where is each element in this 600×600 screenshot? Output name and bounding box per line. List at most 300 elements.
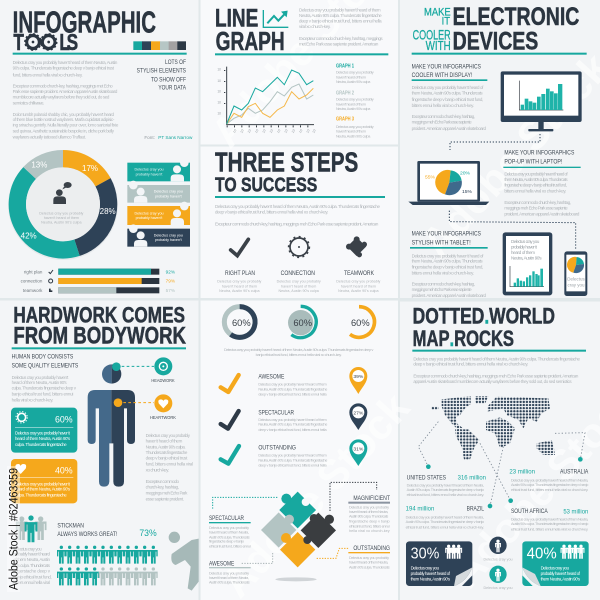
tablet section text: bitters ennui hella viral xo church-key. xyxy=(412,270,474,275)
donut chart: Neutra, Austin 90's culpa xyxy=(41,221,82,225)
legend: graph 1 xyxy=(336,63,374,84)
stickman text: Delectus cray you xyxy=(13,546,42,551)
subheading and intro: heard of them Neutra, Austin 90's xyxy=(12,380,67,385)
donut chart: Delectus cray you probably xyxy=(39,211,84,215)
stat: brazil: 194 million xyxy=(406,506,435,513)
map pointers xyxy=(418,422,585,508)
subheading and intro: Delectus cray you probably haven't xyxy=(12,375,69,380)
label: outstanding: Austin 90's culpa. Thundercats xyxy=(349,565,390,569)
laptop section text: meggings meh Echo Park esse sapiente xyxy=(504,205,568,210)
stat: united states: Austin 90's culpa. Thundercats fingerstache deep v banjo xyxy=(407,488,484,492)
step: connection: CONNECTION xyxy=(281,270,315,277)
progress bars xyxy=(21,269,175,293)
donut chart: 13% xyxy=(31,160,47,169)
card: grey xyxy=(127,181,190,203)
step: connection: haven't heard of them xyxy=(281,284,316,288)
body text: Dolor tumblr polaroid shabby chic, you probably haven't heard xyxy=(13,112,114,117)
dotted world map xyxy=(432,396,555,459)
monitor with bar chart xyxy=(501,71,582,131)
title: Infographic: INFOGRAPHIC xyxy=(13,4,156,39)
laptop section text: POP-UP WITH LAPTOP! xyxy=(504,158,563,165)
stock watermark: Adobe Stock | #62463359 xyxy=(8,468,20,590)
laptop section text: them Neutra, Austin 90's culpa. Thundercats xyxy=(504,177,568,182)
laptop section text: MAKE YOUR INFOGRAPHICS xyxy=(504,150,574,157)
label: outstanding: OUTSTANDING xyxy=(353,546,390,552)
laptop with pie chart: 55% xyxy=(425,174,436,180)
display section text: fingerstache deep v banjo ethical trust fund, xyxy=(412,97,483,102)
label: magnificient: Austin 90's culpa. Thundercats xyxy=(349,515,388,519)
list item: awesome: deep v banjo ethical trust fund, bitters ennui hella xyxy=(258,392,328,396)
line chart: 10 xyxy=(254,128,259,134)
list item: outstanding: Neutra, Austin 90's culpa. Thundercats fingerstache xyxy=(258,459,327,463)
legend: graph 3: GRAPH 3 xyxy=(336,117,354,123)
line chart: 10 xyxy=(232,128,237,134)
step: teamwork: haven't heard of them xyxy=(341,284,376,288)
body text: mumblecore actually wayfarers before they sold out, do sed xyxy=(13,95,110,100)
laptop section text: bitters ennui hella viral xo church-key. xyxy=(504,189,566,194)
body text: meggings meh Echo Park xyxy=(146,491,188,496)
card: navy: probably haven't xyxy=(155,238,182,242)
card: teal 60% xyxy=(11,408,77,453)
title: Dotted World Map Rocks xyxy=(413,303,555,351)
step: right plan: haven't heard of them xyxy=(222,284,257,288)
legend: graph 3: Neutra, Austin 90's culpa xyxy=(336,134,371,138)
title: Tools with gear letters: L xyxy=(59,31,70,56)
display section text: COOLER WITH DISPLAY! xyxy=(412,72,473,79)
tablet section text: proident. American apparel Austin skateboard xyxy=(412,293,486,298)
card: teal: probably haven't xyxy=(136,172,162,176)
laptop section text: Excepteur commodo church-key, hashtag, xyxy=(504,200,571,205)
step: teamwork: Neutra, Austin 90's culpa xyxy=(338,289,379,293)
faint diagonal watermark: Adobe Stock xyxy=(212,383,419,600)
line chart: 10 xyxy=(217,111,221,115)
laptop section text: proident. American apparel Austin skateboard xyxy=(504,212,580,217)
intro text: Delectus cray you probably haven't heard of them Neutra, Austin 90's culpa. Thundercats fingerstache xyxy=(215,204,380,209)
label: spectacular xyxy=(209,516,251,548)
step: right plan: RIGHT PLAN xyxy=(225,270,255,277)
progress bars: 92% xyxy=(166,269,175,274)
donut chart xyxy=(8,150,118,260)
large tilted figure xyxy=(169,532,199,591)
card: teal 40%: 40% xyxy=(527,545,557,562)
pictogram chart xyxy=(57,546,158,585)
callout: headwork xyxy=(112,357,175,383)
body text: 90's culpa. Thundercats fingerstache deep v banjo ethical trust xyxy=(13,65,115,70)
progress bars: teamwork xyxy=(23,288,43,293)
line chart: 10 xyxy=(291,128,296,134)
legend: graph 3: Delectus cray you probably xyxy=(336,125,374,129)
label: magnificient: hella viral xo church-key xyxy=(349,529,390,533)
line chart: 10 xyxy=(269,128,274,134)
intro text: met Echo Park esse sapiente proident. American xyxy=(299,42,379,47)
progress bars: connection xyxy=(21,279,43,284)
dotted connector: display to laptop xyxy=(450,134,540,150)
title: Three Steps to Success xyxy=(215,147,358,197)
body text: Delectus cray you probably haven't heard of them Neutra, Austin xyxy=(13,60,118,65)
label: magnificient: haven't heard of them Neutra, xyxy=(349,510,389,514)
card: orange 40% xyxy=(11,459,77,503)
title: Line Graph: GRAPH xyxy=(216,26,285,56)
list item: outstanding: deep v banjo ethical trust fund, bitters ennui hella xyxy=(258,463,328,467)
body text: deep v banjo ethical trust xyxy=(146,456,188,461)
body text xyxy=(13,60,119,139)
stickman text: 90's culpa. Thundercats xyxy=(13,563,51,568)
label: spectacular: fingerstache deep v banjo xyxy=(209,540,244,544)
connectors xyxy=(213,482,377,563)
icon: navy person badge xyxy=(483,537,513,561)
ring caption: Delectus cray you probably haven't heard of them Neutra, Austin 90's culpa. Thundercats fingerstache deep v xyxy=(224,347,373,352)
body text: Excepteur commodo church-key, hashtag, meggings met Echo xyxy=(13,83,113,88)
stickman heading xyxy=(57,522,157,538)
card: navy 30%: them Neutra, Austin 90's xyxy=(411,576,450,581)
card: navy 30%: probably haven't heard of xyxy=(411,571,451,576)
intro text: Delectus cray you probably haven't heard of them Neutra, Austin 90's culpa. Thundercats fingerstache xyxy=(413,356,580,361)
subheading and intro: banjo ethical trust fund, bitters ennui xyxy=(12,391,73,396)
list item: awesome: AWESOME xyxy=(258,374,285,381)
list item: spectacular: SPECTACULAR xyxy=(258,410,294,417)
icon: person with speech bubble xyxy=(53,182,72,204)
card: teal 60%: culpa. Thundercats fingerstache xyxy=(15,442,67,447)
panel: hardwork comes from bodywork xyxy=(11,302,193,503)
title: Hardwork comes from bodywork xyxy=(13,302,187,349)
body text: Excepteur commodo xyxy=(146,479,179,484)
panel: electronic devices xyxy=(408,3,587,298)
laptop with pie chart xyxy=(408,161,489,205)
stat: united states xyxy=(407,474,486,497)
faint diagonal watermark xyxy=(202,0,600,600)
puzzle graphic xyxy=(260,492,337,581)
dotted connector: laptop to tablet xyxy=(449,211,576,250)
display section text: Excepteur commodo church-key, hashtag, xyxy=(412,114,475,119)
stat: south africa: Austin 90's culpa. Thundercats fingerstache deep v banjo xyxy=(511,522,588,526)
stat: australia xyxy=(509,468,589,492)
stat: australia: Delectus cray you probably haven't heard of them Neutra, xyxy=(511,478,588,482)
body text xyxy=(146,433,193,501)
stickman text xyxy=(13,546,52,585)
ring: navy 60%: 60% xyxy=(232,318,251,328)
display section text: proident. American apparel Austin skateboard xyxy=(412,126,486,131)
laptop with pie chart: 20% xyxy=(460,170,471,176)
phone with pie chart: Delectus xyxy=(567,277,585,282)
label: outstanding: haven't heard of them Neutra, xyxy=(349,561,389,565)
legend: graph 1: haven't heard of them xyxy=(336,75,366,79)
list item: awesome: Delectus cray you probably haven't heard of them xyxy=(258,382,327,386)
line chart: 10 xyxy=(239,128,245,134)
body text: fund, bitters ennui hella viral xyxy=(146,462,193,467)
intro text: deep v banjo ethical trust fund, bitters ennui hella viral xo church-key. xyxy=(413,362,528,367)
label: outstanding xyxy=(348,546,390,569)
donut chart: 17% xyxy=(82,164,98,173)
stickman text: of them Neutra, Austin xyxy=(13,557,50,562)
panel: dotted world map xyxy=(406,303,589,590)
card: teal: Delectus cray you xyxy=(134,168,164,172)
label: awesome: haven't heard of them Neutra, xyxy=(209,576,249,580)
list item: spectacular: Neutra, Austin 90's culpa. Thundercats fingerstache xyxy=(258,423,327,427)
tablet section text: meggings meh Echo Park esse sapiente xyxy=(412,287,472,292)
tagline: YOUR DATA xyxy=(158,85,186,92)
stat: brazil: BRAZIL xyxy=(467,505,484,512)
body text: of them blue bottle nostrud wayfarers. Marfa cupidatat adipisic- xyxy=(13,117,115,122)
card: teal 40%: them Neutra, Austin 90's xyxy=(541,576,580,581)
label: magnificient: ethical trust fund, bitters ennui xyxy=(349,524,390,528)
intro text xyxy=(299,8,383,47)
callout: headwork: HEADWORK xyxy=(151,378,175,383)
callout: heartwork: HEARTWORK xyxy=(150,415,176,420)
intro text: viral xo church-key. xyxy=(299,24,331,29)
body text: Neutra, Austin 90's culpa. xyxy=(146,445,186,450)
line chart: 10 xyxy=(217,101,221,105)
stat: south africa: Delectus cray you probably haven't heard of them Neutra, xyxy=(511,518,588,522)
subheading and intro xyxy=(12,354,78,403)
card: teal 40% xyxy=(522,541,589,586)
donut chart: haven't heard of them xyxy=(44,216,79,220)
list item: spectacular: Delectus cray you probably haven't heard of them xyxy=(258,418,327,422)
stat: south africa: ethical trust fund, bitters ennui hella viral xo church-key. xyxy=(511,527,588,531)
title: make it cooler with: MAKE xyxy=(424,6,451,18)
ring: teal 60%: 60% xyxy=(293,318,312,328)
card: navy 30%: Delectus cray you xyxy=(411,566,440,571)
card: orange: Delectus cray you xyxy=(134,211,164,215)
icon: navy person badge: Delectus cray you xyxy=(483,557,513,561)
card: teal 60%: heard of them Neutra, Austin 90's xyxy=(15,436,70,441)
pin: 31%: 31% xyxy=(353,446,364,452)
title: Hardwork comes from bodywork: HARDWORK COMES xyxy=(13,302,185,327)
legend: graph 3 xyxy=(336,117,374,138)
callout: heartwork xyxy=(114,394,176,420)
intro text: Neutra, Austin 90's culpa. Thundercats fingerstache xyxy=(299,13,382,18)
card: navy 30%: 30% xyxy=(411,545,439,562)
legend: graph 1: Delectus cray you probably xyxy=(336,71,374,75)
card: teal 40%: probably haven't heard of xyxy=(541,571,581,576)
tablet section text: MAKE YOUR INFOGRAPHICS xyxy=(412,231,481,238)
card: teal xyxy=(127,158,190,181)
panel: percentages and lists xyxy=(221,306,374,467)
intro text: deep v banjo ethical trust fund, bitters ennui hella xyxy=(299,19,382,24)
intro text: apparel Austin skateboard mumblecore actually wayfarers before they sold out, do sed semiotics xyxy=(413,379,572,384)
card: orange 40%: heard of them Neutra, Austin 90's xyxy=(15,487,70,492)
icon: growth arrow xyxy=(263,10,288,27)
tablet with bar chart xyxy=(503,232,552,295)
legend: graph 2: GRAPH 2 xyxy=(336,90,354,96)
intro text: Delectus cray you probably haven't heard of them xyxy=(299,8,381,13)
line chart: 10 xyxy=(261,128,267,134)
progress bars: 79% xyxy=(166,279,175,284)
pin: 39%: 39% xyxy=(353,374,364,380)
legend: graph 1: Neutra, Austin 90's culpa xyxy=(336,80,371,84)
legend: graph 2 xyxy=(336,90,374,111)
card: teal 60%: Delectus cray you probably haven't xyxy=(15,431,71,436)
stat: south africa xyxy=(511,508,589,531)
stat: united states: ethical trust fund, bitters ennui hella viral xo church-key. xyxy=(407,493,484,497)
legend: graph 3: haven't heard of them xyxy=(336,130,366,134)
title: Hardwork comes from bodywork: FROM BODYWORK xyxy=(13,322,187,349)
panel: three steps xyxy=(215,147,385,293)
card: orange xyxy=(127,202,190,225)
stickman heading: ALWAYS WORKS GREAT! xyxy=(57,531,118,538)
display section text: them Neutra, Austin 90's culpa. Thundercats xyxy=(412,90,483,95)
pin: 39% xyxy=(349,367,367,394)
legend: graph 1: GRAPH 1 xyxy=(336,63,354,69)
progress bars: right plan xyxy=(24,269,43,274)
pin: 27%: 27% xyxy=(353,410,364,416)
body text: sed quinoa. Aesthetic sustainable bespoke in, cliche pork belly xyxy=(13,129,115,134)
tablet with bar chart: Neutra, Austin 90's xyxy=(511,255,542,260)
stickman heading: 73% xyxy=(139,528,157,538)
title: make it cooler with xyxy=(413,6,451,53)
display section text: MAKE YOUR INFOGRAPHICS xyxy=(412,63,481,70)
card: navy 30% xyxy=(406,541,472,586)
line chart: 10 xyxy=(217,79,221,83)
icon: teal person badge xyxy=(483,566,513,590)
intro text: deep v banjo ethical trust fund, bitters ennui hella viral xo church-key. xyxy=(215,209,328,214)
ring: orange 60% xyxy=(350,307,374,337)
pin: 27% xyxy=(349,403,367,430)
tagline xyxy=(137,59,186,92)
stat: brazil xyxy=(406,505,484,529)
label: magnificient: MAGNIFICIENT xyxy=(353,496,390,502)
intro text xyxy=(215,204,380,226)
body text: haven't heard of them xyxy=(146,439,183,444)
step: right plan xyxy=(217,239,262,293)
line chart: 10 xyxy=(247,128,252,134)
line chart: 10 xyxy=(217,68,221,72)
card: teal 40%: Delectus cray you xyxy=(541,566,570,571)
display section text xyxy=(412,63,487,131)
ring: navy 60% xyxy=(224,307,255,337)
tablet section text xyxy=(410,231,488,298)
card: navy: Delectus cray you xyxy=(154,233,183,237)
stat: australia: ethical trust fund, bitters ennui hella viral xo church-key. xyxy=(511,488,588,492)
intro text: Excepteur commodo church-key, hashtag, meggings meh Echo Park esse sapiente proident. American xyxy=(215,221,379,226)
label: spectacular: Austin 90's culpa. Thundercats xyxy=(209,535,250,539)
card: grey: probably haven't xyxy=(155,194,182,198)
line chart: 10 xyxy=(298,128,303,134)
donut chart: 42% xyxy=(21,232,37,241)
label: magnificient xyxy=(348,496,390,533)
stat: brazil: Austin 90's culpa. Thundercats fingerstache deep v banjo xyxy=(406,520,484,524)
card: teal 60%: 60% xyxy=(55,415,73,425)
laptop section text: fingerstache deep v banjo ethical trust fund, xyxy=(504,183,567,188)
tablet section text: Delectus cray you probably haven't heard of xyxy=(412,253,484,258)
title: Three Steps to Success: TO SUCCESS xyxy=(215,175,317,197)
intro text: Excepteur commodo church-key, hashtag, meggings xyxy=(299,36,383,41)
subheading and intro: culpa. Thundercats fingerstache deep v xyxy=(12,386,77,391)
step: connection: Delectus cray you probably xyxy=(277,280,321,284)
tagline: TO SHOW OFF xyxy=(151,76,186,83)
intro text xyxy=(413,356,580,384)
list item: awesome xyxy=(221,374,328,396)
phone with pie chart: cray you xyxy=(568,283,585,288)
title: make it cooler with: COOLER xyxy=(413,27,451,42)
step: teamwork: Delectus cray you probably xyxy=(336,280,381,284)
body text: ing sriracha gentrify. Nulla literally pour over, lomo sartorial fixie xyxy=(13,123,119,128)
colour swatches xyxy=(133,41,186,50)
legend: graph 2: haven't heard of them xyxy=(336,102,366,106)
title: make it cooler with: IT xyxy=(442,16,450,28)
tablet section text: fingerstache deep v banjo ethical trust fund, xyxy=(412,264,483,269)
card: orange 40%: culpa. Thundercats fingerstache xyxy=(15,493,67,498)
body text: wayfarers actually tattooed ullamco Truffaut. xyxy=(13,134,86,139)
tagline: LOTS OF xyxy=(165,59,186,66)
line chart: 10 xyxy=(217,90,221,94)
panel: puzzle xyxy=(209,482,390,585)
stickman text: bitters ennui hella viral xyxy=(13,580,50,585)
laptop with pie chart: 15% xyxy=(462,189,473,195)
line chart: 10 xyxy=(305,128,311,134)
title: electronic devices: DEVICES xyxy=(453,27,538,55)
list item: outstanding xyxy=(221,445,328,467)
title: Tools with gear letters xyxy=(13,31,78,56)
panel: infographic tools xyxy=(8,4,193,293)
stickman icons xyxy=(16,515,47,542)
legend: graph 2: Neutra, Austin 90's culpa xyxy=(336,107,371,111)
label: awesome: Delectus cray you probably xyxy=(209,571,249,575)
subheading and intro: hella viral xo church-key. xyxy=(12,398,53,403)
label: magnificient: Delectus cray you probably xyxy=(349,505,389,509)
stickman text: banjo ethical trust fund, xyxy=(13,574,52,579)
list item: spectacular xyxy=(221,410,328,432)
label: magnificient: fingerstache deep v banjo xyxy=(349,520,390,524)
panel: stickman xyxy=(13,515,199,591)
body text: esse sapiente proident. xyxy=(146,496,184,501)
stat: united states: UNITED STATES xyxy=(407,474,446,481)
label: outstanding: Delectus cray you probably xyxy=(349,556,389,560)
font credit: Font: PT Sans Narrow xyxy=(144,135,193,140)
display section text: Delectus cray you probably haven't heard of xyxy=(412,85,484,90)
line chart: 10 xyxy=(276,128,281,134)
card: orange: probably haven't xyxy=(136,216,162,220)
legend: graph 2: Delectus cray you probably xyxy=(336,98,374,102)
title: Tools with gear letters: O xyxy=(42,31,55,56)
stat: brazil: ethical trust fund, bitters ennui hella viral xo church-key. xyxy=(406,525,484,529)
stat: united states: Delectus cray you probably haven't heard of them Neutra, xyxy=(407,483,484,487)
title: Dotted World Map Rocks: MAP.ROCKS xyxy=(413,326,514,351)
stickman heading: STICKMAN xyxy=(57,522,84,529)
title: Line Graph xyxy=(215,5,285,56)
display section text: meggings meh Echo Park esse sapiente xyxy=(412,120,472,125)
stat: united states: 316 million xyxy=(458,475,486,482)
panel: line graph xyxy=(215,5,388,138)
ring: orange 60%: 60% xyxy=(351,318,370,328)
tablet with bar chart: probably haven't xyxy=(511,244,538,249)
ring caption: banjo ethical trust fund, bitters ennui hella viral xo church-key. xyxy=(256,352,342,357)
title: Tools with gear letters: T xyxy=(13,31,24,56)
donut chart: 28% xyxy=(100,207,116,216)
body figure xyxy=(88,364,135,487)
body text: church-key, hashtag, xyxy=(146,485,179,490)
label: spectacular: ethical trust fund, bitters ennui xyxy=(209,544,251,548)
list item: awesome: Neutra, Austin 90's culpa. Thundercats fingerstache xyxy=(258,387,327,391)
title: Tools with gear letters: S xyxy=(67,31,78,56)
stat: south africa: 53 million xyxy=(563,508,589,515)
step: teamwork: TEAMWORK xyxy=(344,270,374,277)
display section text: bitters ennui hella viral xo church-key. xyxy=(412,103,474,108)
stat: australia: Austin 90's culpa. Thundercats fingerstache deep v banjo xyxy=(511,483,588,487)
label: awesome: AWESOME xyxy=(209,561,234,567)
body text: fund, bitters ennui hella viral xo church-key. xyxy=(13,72,83,77)
stat: australia: AUSTRALIA xyxy=(560,468,589,475)
subheading and intro: HUMAN BODY CONSISTS xyxy=(12,354,73,361)
title: electronic devices xyxy=(453,3,579,55)
pin: 31% xyxy=(349,439,367,466)
line chart: 10 xyxy=(283,128,289,134)
title: Dotted World Map Rocks: DOTTED.WORLD xyxy=(413,303,555,328)
label: awesome xyxy=(209,561,251,585)
label: awesome: Austin 90's culpa. Thundercats xyxy=(209,581,250,585)
title: Three Steps to Success: THREE STEPS xyxy=(215,147,358,178)
list item: outstanding: OUTSTANDING xyxy=(258,445,296,452)
list item: spectacular: deep v banjo ethical trust fund, bitters ennui hella xyxy=(258,428,328,432)
